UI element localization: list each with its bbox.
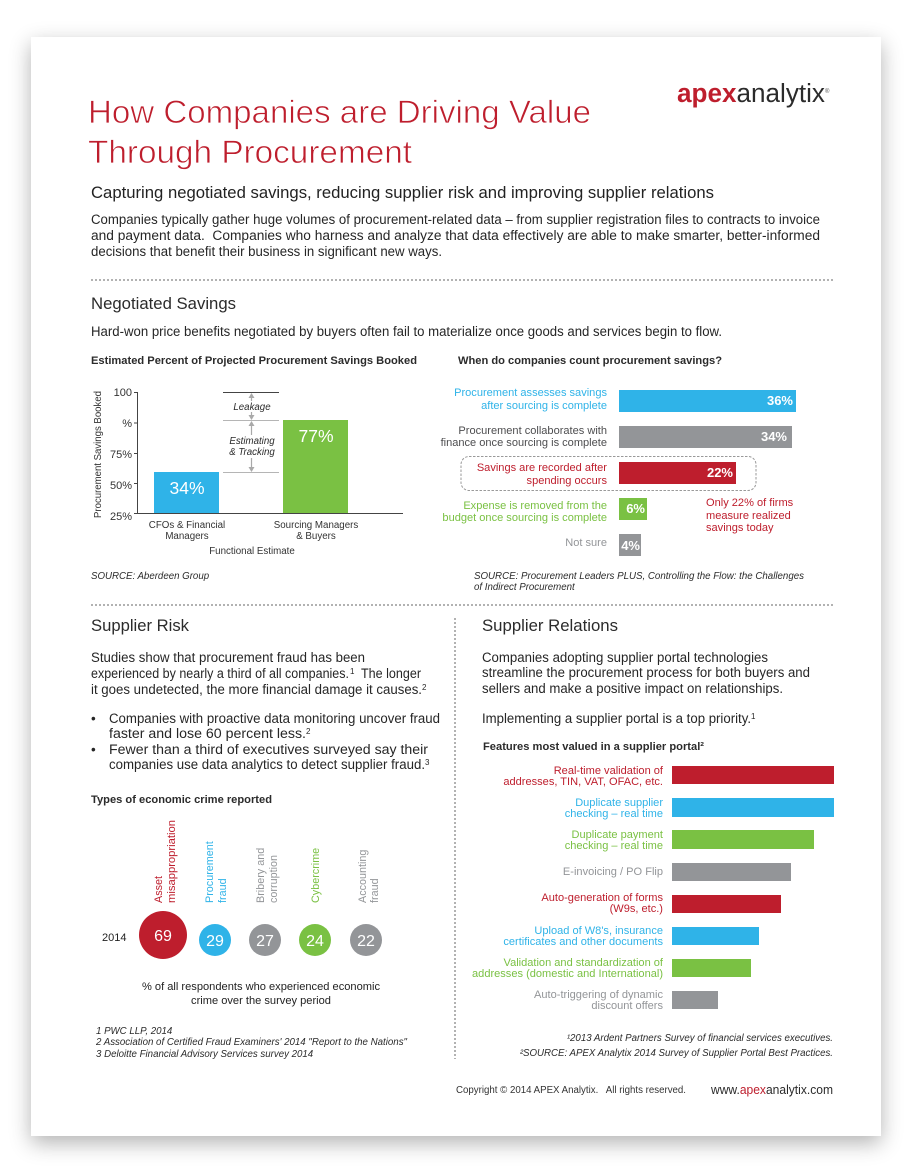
y axis ticks: 50% <box>110 480 132 492</box>
bubble: asset misappropriation: Asset <box>153 876 165 903</box>
subtitle: Capturing negotiated savings, reducing supplier risk and improving supplier relations <box>91 183 714 202</box>
chart title: Features most valued in a supplier portal² <box>483 741 704 753</box>
bubble: accounting fraud: 22 <box>357 933 375 950</box>
bubble: bribery and corruption <box>249 848 281 956</box>
intro paragraph: decisions that benefit their business in significant new ways. <box>91 244 442 259</box>
body text: The longer <box>361 666 421 681</box>
body text: 2 <box>422 683 427 692</box>
bar row: 34%: 34% <box>761 429 787 444</box>
x axis labels: Sourcing Managers <box>274 520 358 531</box>
bar: real-time validation: Real-time validation of <box>554 765 664 777</box>
footnotes: 1 PWC LLP, 2014 <box>96 1026 173 1037</box>
bullets: 2 <box>306 727 311 736</box>
body text: experienced by nearly a third of all companies. <box>91 666 349 681</box>
bar row: 4% <box>565 534 641 556</box>
bar: real-time validation <box>503 765 834 788</box>
callout: measure realized <box>706 510 791 522</box>
source <box>474 571 804 593</box>
body text: Companies adopting supplier portal technologies <box>482 650 768 665</box>
title <box>88 94 591 170</box>
intro paragraph <box>91 212 820 259</box>
x axis labels: & Buyers <box>296 531 336 542</box>
bar: duplicate supplier: Duplicate supplier <box>575 797 663 809</box>
chart title: Types of economic crime reported <box>91 794 272 806</box>
bubble: cybercrime: 24 <box>306 933 324 950</box>
bar: auto-generation: Auto-generation of forms <box>541 892 663 904</box>
y axis label: Procurement Savings Booked <box>93 391 104 518</box>
bar: duplicate payment: checking – real time <box>565 840 663 852</box>
bullets: Companies with proactive data monitoring uncover fraud <box>109 711 440 726</box>
chart caption: % of all respondents who experienced economic <box>142 981 380 993</box>
callout <box>706 497 794 534</box>
bullets: • <box>91 711 96 726</box>
y axis ticks: 75% <box>110 449 132 461</box>
negotiated savings description: Hard-won price benefits negotiated by buyers often fail to materialize once goods and services begin to flow. <box>91 324 722 339</box>
bubble: bribery and corruption: corruption <box>268 855 280 903</box>
bubble: bribery and corruption: 27 <box>256 933 274 950</box>
body text: it goes undetected, the more financial damage it causes. <box>91 682 422 697</box>
logo: apexanalytix: ® <box>825 88 830 95</box>
chart caption: crime over the survey period <box>191 995 331 1007</box>
bar row: 22% <box>477 462 736 487</box>
body text: Implementing a supplier portal is a top priority. <box>482 711 751 726</box>
bar: duplicate supplier: checking – real time <box>565 808 663 820</box>
website: www.apexanalytix.com <box>710 1083 833 1097</box>
bullets <box>91 711 440 772</box>
body text: 1 <box>350 667 355 676</box>
bar: auto-triggering <box>534 989 718 1012</box>
body text <box>91 650 427 697</box>
bar: CFOs 34%: 34% <box>169 478 205 498</box>
panel: savings booked chart <box>91 355 417 582</box>
heading: Negotiated Savings: Negotiated Savings <box>91 294 236 313</box>
bar: duplicate supplier <box>565 797 834 820</box>
leakage annotation: Leakage <box>233 402 271 413</box>
feature bars <box>472 765 834 1012</box>
footnotes <box>520 1033 833 1059</box>
footnotes: 3 Deloitte Financial Advisory Services survey 2014 <box>96 1049 314 1060</box>
copyright: Copyright © 2014 APEX Analytix. All rights reserved. <box>456 1085 686 1096</box>
bullets: companies use data analytics to detect supplier fraud. <box>109 757 425 772</box>
body text: streamline the procurement process for both buyers and <box>482 665 810 680</box>
bar: Sourcing Managers 77%: 77% <box>298 426 334 446</box>
bubble: procurement fraud: fraud <box>217 878 229 903</box>
intro paragraph: and payment data. Companies who harness and analyze that data effectively are able to make smarter, better-informed <box>91 228 820 243</box>
bar row: 36% <box>454 387 796 412</box>
bullets: Fewer than a third of executives surveyed say their <box>109 742 429 757</box>
bar: auto-triggering: discount offers <box>591 1000 663 1012</box>
bar: duplicate payment <box>565 829 814 852</box>
bar row: 36%: after sourcing is complete <box>481 400 607 412</box>
bar row: 22%: 22% <box>707 465 733 480</box>
callout: savings today <box>706 522 774 534</box>
y axis ticks: 25% <box>110 511 132 523</box>
x axis labels <box>149 520 358 557</box>
source: of Indirect Procurement <box>474 582 576 593</box>
bar row: 22%: spending occurs <box>527 475 607 487</box>
callout: Only 22% of firms <box>706 497 794 509</box>
heading: Supplier Relations <box>482 616 618 635</box>
bubble: accounting fraud: fraud <box>369 878 381 903</box>
bar row: 6%: Expense is removed from the <box>463 500 607 512</box>
bar row: 4%: Not sure <box>565 537 607 549</box>
bubble chart: 2014 <box>102 932 126 944</box>
bullets: faster and lose 60 percent less. <box>109 726 306 741</box>
bullets: • <box>91 742 96 757</box>
chart title: Estimated Percent of Projected Procurement Savings Booked <box>91 355 417 367</box>
logo: apexanalytix: apexanalytix <box>677 80 825 108</box>
bubble: asset misappropriation: misappropriation <box>166 820 178 903</box>
bubble: procurement fraud: Procurement <box>204 841 216 903</box>
x axis labels: Functional Estimate <box>209 546 295 557</box>
bar row: 34% <box>441 425 792 449</box>
bar row: 22%: Savings are recorded after <box>477 462 607 474</box>
body text <box>482 650 810 726</box>
x axis labels: CFOs & Financial <box>149 520 225 531</box>
bar row: 6%: budget once sourcing is complete <box>442 512 607 524</box>
leakage annotation: Estimating <box>229 436 275 447</box>
bar: e-invoicing <box>563 863 791 881</box>
intro paragraph: Companies typically gather huge volumes of procurement-related data – from supplier registration files to contracts to invoice <box>91 212 820 227</box>
bar: real-time validation: addresses, TIN, VAT, OFAC, etc. <box>503 776 663 788</box>
y axis ticks: % <box>122 418 132 430</box>
bubble: procurement fraud: 29 <box>206 933 224 950</box>
bar row: 6%: 6% <box>626 501 645 516</box>
bar: validation: addresses (domestic and International) <box>472 968 663 980</box>
panel: when savings counted chart <box>441 355 804 593</box>
title: How Companies are Driving Value <box>88 94 591 130</box>
heading: Supplier Risk <box>91 616 189 635</box>
bubble: asset misappropriation: 69 <box>154 928 172 945</box>
body text: 1 <box>751 712 756 721</box>
footnotes <box>95 1026 408 1060</box>
bar: CFOs 34% <box>154 472 219 513</box>
bar row: 34%: finance once sourcing is complete <box>441 437 607 449</box>
body text: sellers and make a positive impact on relationships. <box>482 681 783 696</box>
footnotes: ²SOURCE: APEX Analytix 2014 Survey of Supplier Portal Best Practices. <box>520 1048 833 1059</box>
bar: upload <box>503 925 759 948</box>
bar row: 34%: Procurement collaborates with <box>458 425 607 437</box>
bubble chart <box>102 820 382 959</box>
bar row: 36%: Procurement assesses savings <box>454 387 607 399</box>
highlight box <box>461 456 756 490</box>
bubble: cybercrime <box>299 848 331 956</box>
bar: duplicate payment: Duplicate payment <box>572 829 663 841</box>
leakage annotation <box>223 392 279 472</box>
bubble: asset misappropriation <box>139 820 187 959</box>
chart title: When do companies count procurement savings? <box>458 355 722 367</box>
bullets: 3 <box>425 758 430 767</box>
bar row: 6% <box>442 498 647 524</box>
chart caption <box>142 981 380 1007</box>
bubble: accounting fraud: Accounting <box>357 850 369 903</box>
bar: validation: Validation and standardization of <box>504 957 664 969</box>
bar row: 4%: 4% <box>621 538 640 553</box>
bubble: accounting fraud <box>350 850 382 956</box>
bar: Sourcing Managers 77% <box>283 420 348 513</box>
leakage annotation: & Tracking <box>229 447 275 458</box>
bubble: procurement fraud <box>199 841 231 956</box>
footnotes: ¹2013 Ardent Partners Survey of financial services executives. <box>567 1033 833 1044</box>
bar: upload: certificates and other documents <box>503 936 663 948</box>
bar: auto-generation <box>541 892 781 915</box>
source: SOURCE: Procurement Leaders PLUS, Controlling the Flow: the Challenges <box>474 571 804 582</box>
body text: Studies show that procurement fraud has been <box>91 650 365 665</box>
title: Through Procurement <box>88 134 412 170</box>
bar: e-invoicing: E-invoicing / PO Flip <box>563 866 663 878</box>
bubble: bribery and corruption: Bribery and <box>255 848 267 903</box>
panel: supplier risk <box>91 616 440 1060</box>
footnotes: 2 Association of Certified Fraud Examiners' 2014 "Report to the Nations" <box>95 1037 408 1048</box>
source: SOURCE: Aberdeen Group <box>91 571 210 582</box>
panel: supplier relations <box>472 616 834 1059</box>
y axis ticks <box>110 387 132 523</box>
y axis ticks: 100 <box>114 387 132 399</box>
x axis labels: Managers <box>165 531 209 542</box>
bar: validation <box>472 957 751 980</box>
bar: auto-triggering: Auto-triggering of dynamic <box>534 989 663 1001</box>
bar: upload: Upload of W8's, insurance <box>534 925 663 937</box>
bar: auto-generation: (W9s, etc.) <box>610 903 663 915</box>
bubble: cybercrime: Cybercrime <box>310 848 322 903</box>
bar row: 36%: 36% <box>767 393 793 408</box>
